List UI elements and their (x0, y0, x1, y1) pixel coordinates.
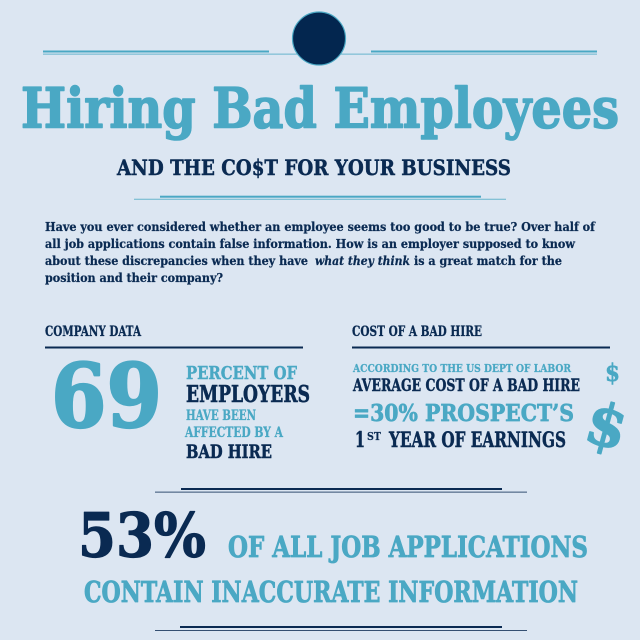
panel: cost of a bad hire (352, 324, 635, 464)
icon: small dollar sign: $ (605, 358, 620, 387)
statistic description: EMPLOYERS (186, 381, 310, 408)
cost statistic (352, 361, 580, 452)
intro paragraph: about these discrepancies when they have (45, 253, 308, 268)
intro paragraph: position and their company? (45, 270, 223, 285)
cost statistic: =30% PROSPECT’S (353, 400, 574, 427)
panel: company data (45, 324, 310, 463)
intro paragraph (45, 219, 596, 285)
bottom divider two (155, 626, 527, 631)
statistic: 53 percent (78, 500, 588, 609)
statistic description: AFFECTED BY A (184, 425, 284, 441)
cost statistic: ACCORDING TO THE US DEPT OF LABOR (352, 361, 571, 375)
subtitle divider (134, 196, 506, 200)
cost statistic: 1 (355, 427, 365, 452)
heading: cost of a bad hire: COST OF A BAD HIRE (352, 324, 482, 340)
cost statistic: ST (367, 430, 382, 443)
top ornament (43, 12, 597, 65)
statistic description: HAVE BEEN (186, 408, 256, 424)
statistic description: BAD HIRE (186, 441, 272, 463)
bottom divider one (155, 488, 527, 492)
subtitle: AND THE CO$T FOR YOUR BUSINESS (116, 156, 511, 181)
intro paragraph: all job applications contain false information. How is an employer supposed to know (45, 236, 575, 251)
statistic: 53 percent: 53% (78, 500, 206, 572)
statistic description (184, 363, 310, 463)
icon: large dollar sign: $ (578, 388, 635, 464)
heading: company data: COMPANY DATA (45, 324, 141, 340)
intro paragraph: Have you ever considered whether an employee seems too good to be true? Over half of (45, 219, 596, 234)
intro paragraph: is a great match for the (414, 253, 562, 268)
statistic description: PERCENT OF (186, 363, 297, 384)
big number 69: 69 (51, 344, 162, 448)
intro paragraph: what they think (315, 253, 410, 268)
cost statistic: YEAR OF EARNINGS (388, 427, 566, 452)
